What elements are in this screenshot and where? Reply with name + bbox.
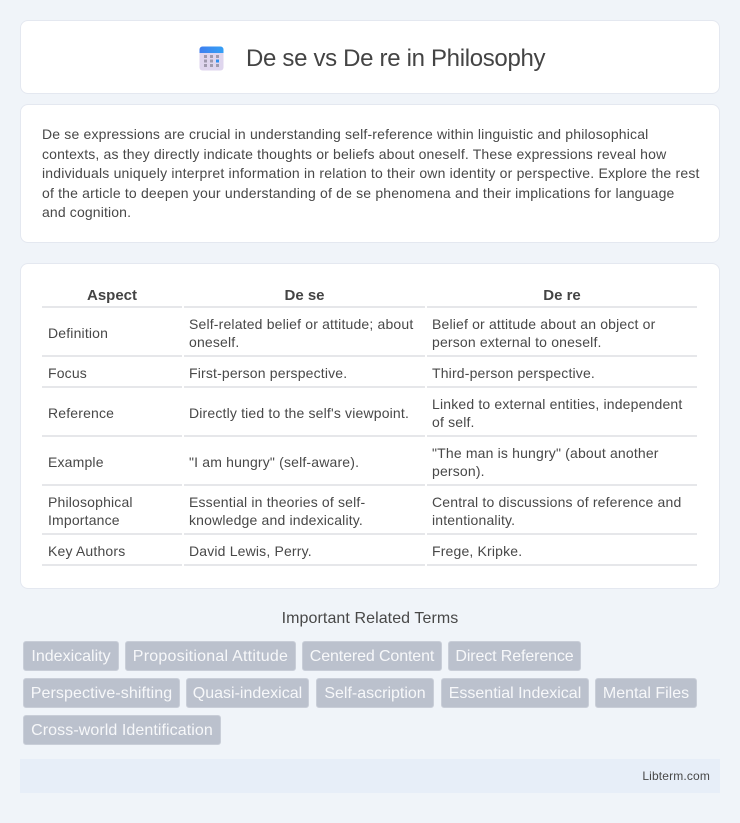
table rows: knowledge and indexicality. — [189, 512, 363, 528]
table rows: Focus — [48, 365, 87, 381]
related term tags: Direct Reference — [455, 648, 574, 665]
related term tags: Perspective-shifting — [31, 685, 172, 702]
related term tags: Self-ascription — [324, 685, 426, 702]
related term tags: Propositional Attitude — [133, 648, 288, 665]
table headers: De se — [284, 287, 325, 304]
table rows: Philosophical — [48, 494, 133, 510]
table rows: "The man is hungry" (about another — [432, 445, 659, 461]
table rows: Importance — [48, 512, 120, 528]
table rows: of self. — [432, 414, 475, 430]
related term tags — [23, 641, 697, 745]
table headers: Aspect — [87, 287, 137, 304]
table headers: De re — [543, 287, 581, 304]
table rows: Linked to external entities, independent — [432, 396, 682, 412]
table rows: First-person perspective. — [189, 365, 347, 381]
table rows: Directly tied to the self's viewpoint. — [189, 405, 409, 421]
table rows: Third-person perspective. — [432, 365, 595, 381]
table rows: Essential in theories of self- — [189, 494, 365, 510]
intro text: individuals uniquely interpret information in relation to their own identity or perspective. Explore the rest — [42, 165, 700, 181]
table rows: "I am hungry" (self-aware). — [189, 454, 359, 470]
heading: related terms: Important Related Terms — [282, 610, 458, 627]
related term tags: Cross-world Identification — [31, 722, 213, 739]
table rows: Example — [48, 454, 104, 470]
table rows: intentionality. — [432, 512, 515, 528]
table rows: person external to oneself. — [432, 334, 602, 350]
table rows: oneself. — [189, 334, 239, 350]
table rows: Definition — [48, 325, 108, 341]
table headers — [87, 287, 581, 304]
intro text: and cognition. — [42, 204, 131, 220]
icon: calendar — [200, 46, 224, 70]
footer — [20, 759, 720, 793]
table rows: Self-related belief or attitude; about — [189, 316, 413, 332]
panel: comparison table — [20, 263, 720, 589]
table rows: Reference — [48, 405, 114, 421]
related term tags: Essential Indexical — [449, 685, 581, 702]
table rows — [42, 306, 697, 566]
panel: header — [20, 20, 720, 94]
footer credit: Libterm.com — [642, 769, 710, 783]
table rows: Belief or attitude about an object or — [432, 316, 655, 332]
related term tags: Centered Content — [310, 648, 434, 665]
table rows: David Lewis, Perry. — [189, 543, 312, 559]
related term tags: Indexicality — [31, 648, 111, 665]
intro text: of the article to deepen your understanding of de se phenomena and their implications for language — [42, 184, 674, 200]
table rows: person). — [432, 463, 485, 479]
table rows: Key Authors — [48, 543, 125, 559]
title: De se vs De re in Philosophy — [246, 45, 545, 72]
intro text — [42, 126, 700, 220]
panel: intro — [20, 104, 720, 243]
table rows: Frege, Kripke. — [432, 543, 522, 559]
related term tags: Quasi-indexical — [193, 685, 302, 702]
related term tags: Mental Files — [603, 685, 689, 702]
intro text: De se expressions are crucial in understanding self-reference within linguistic and philosophical — [42, 126, 648, 142]
intro text: contexts, as they directly indicate thoughts or beliefs about oneself. These expressions reveal how — [42, 146, 666, 162]
table rows: Central to discussions of reference and — [432, 494, 681, 510]
